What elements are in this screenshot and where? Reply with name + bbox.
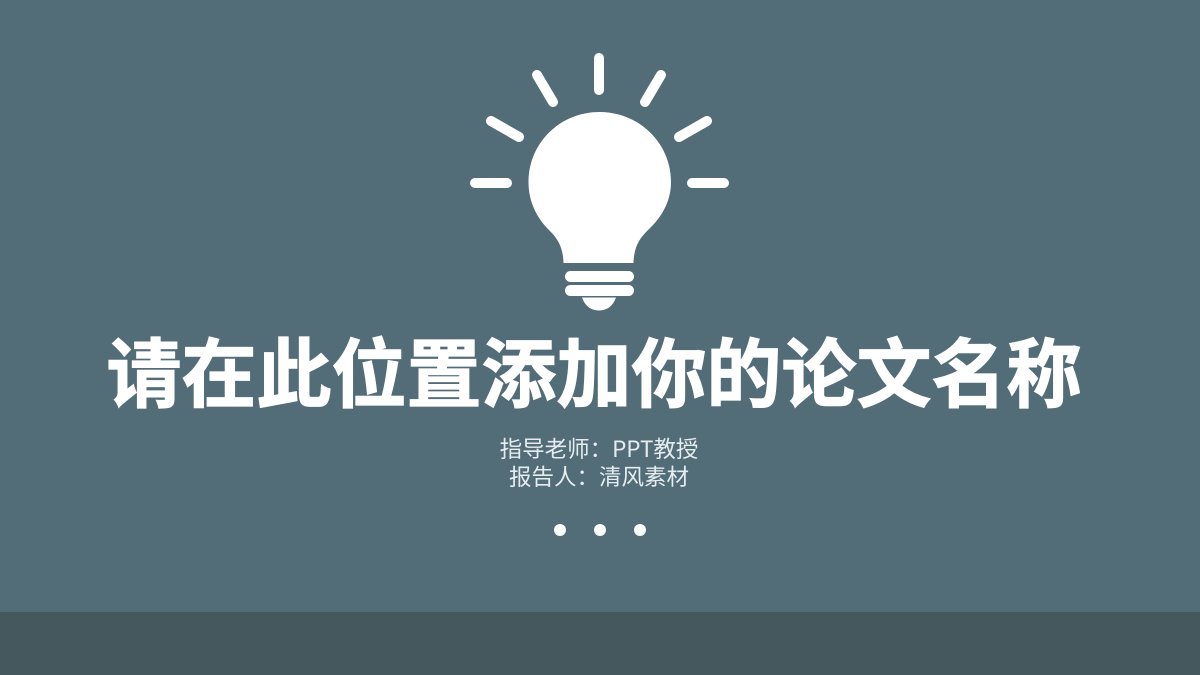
icon: light bulb with rays (470, 53, 729, 310)
footer band (0, 612, 1200, 675)
subtitle text: 指导老师：PPT教授 (500, 432, 698, 464)
title: 请在此位置添加你的论文名称 (106, 333, 1082, 417)
subtitle text (500, 432, 698, 492)
subtitle text: 报告人：清风素材 (509, 460, 689, 492)
decorative dots (554, 524, 646, 536)
